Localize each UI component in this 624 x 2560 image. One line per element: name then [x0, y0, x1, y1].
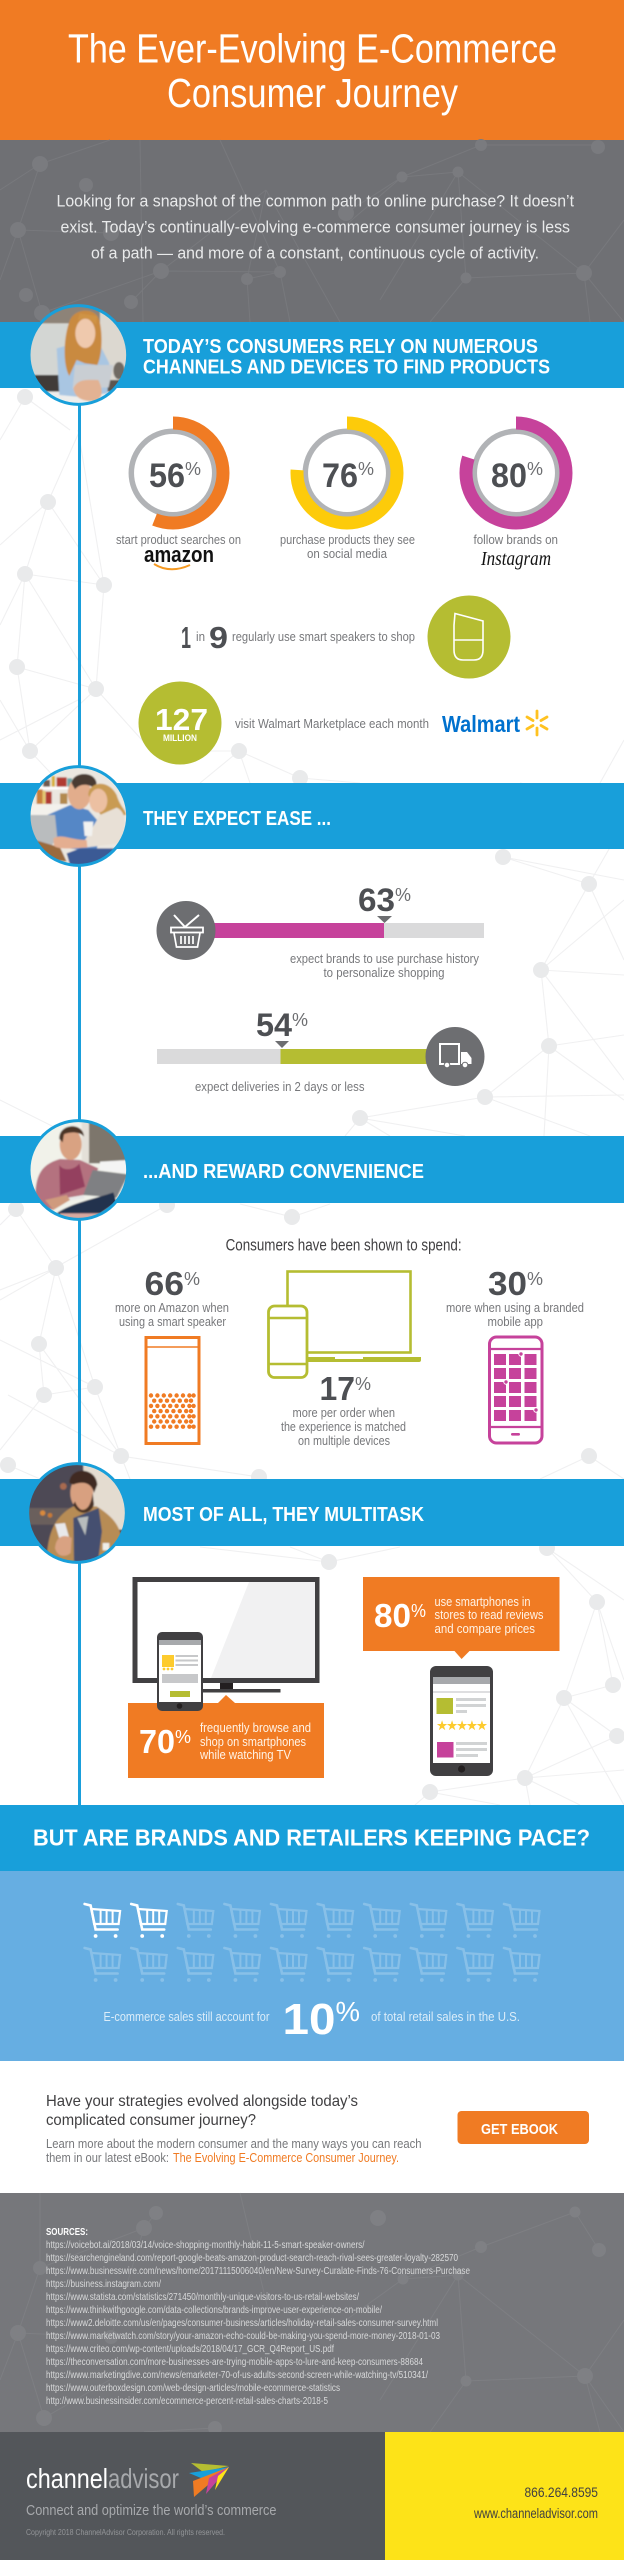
- stat: 17% multiple devices: %: [355, 1374, 371, 1394]
- callout: 80%: and compare prices: [434, 1622, 535, 1636]
- title: [68, 26, 557, 116]
- icon: delivery truck: [426, 1027, 484, 1086]
- stat: 63% purchase history bar: to personalize shopping: [324, 966, 445, 980]
- sources list: https://business.instagram.com/: [46, 2279, 161, 2290]
- heading: CHANNELS AND DEVICES TO FIND PRODUCTS: [143, 356, 550, 378]
- stat: 54% deliveries bar: %: [292, 1010, 308, 1030]
- body text: them in our latest eBook:: [46, 2151, 169, 2165]
- stat: 63% purchase history bar: %: [395, 885, 411, 905]
- stat: 56% amazon: 56: [149, 457, 185, 495]
- callout: 70%: [128, 1695, 324, 1778]
- heading: MOST OF ALL, THEY MULTITASK: [143, 1504, 424, 1526]
- stat: 17% multiple devices: 17: [320, 1370, 355, 1407]
- callout: 80%: [363, 1577, 560, 1659]
- stat: 1 in 9 smart speakers: [181, 596, 510, 678]
- logo: channeladvisor: advisor: [108, 2463, 179, 2494]
- stat: 80% instagram: follow brands on: [474, 533, 558, 547]
- icon: phone showing reviews: [430, 1666, 493, 1776]
- icon: phone with app grid: [490, 1337, 542, 1443]
- stat: 63% purchase history bar: [156, 882, 484, 980]
- icon: smart speaker: [428, 596, 510, 678]
- stat: 17% multiple devices: [268, 1272, 421, 1448]
- subheading: consumers spend: Consumers have been shown to spend:: [226, 1236, 462, 1254]
- body text: Learn more about the modern consumer and the many ways you can reach: [46, 2137, 422, 2151]
- sources list: https://voicebot.ai/2018/03/14/voice-shopping-monthly-habit-11-5-smart-speaker-owners/: [46, 2240, 365, 2251]
- sources list: https://searchengineland.com/report-google-beats-amazon-product-search-reach-rival-sees-greater-loyalty-282570: [46, 2253, 458, 2264]
- statistic text: 10: [282, 1995, 336, 2044]
- stat: 1 in 9 smart speakers: 9: [209, 620, 228, 655]
- marker: [377, 916, 392, 923]
- icon: television: [135, 1580, 317, 1692]
- logo: channeladvisor: [26, 2463, 229, 2497]
- heading: [143, 336, 550, 378]
- stat: 56% amazon: [116, 423, 241, 569]
- sources list: https://www.criteo.com/wp-content/uploads/2018/04/17_GCR_Q4Report_US.pdf: [46, 2344, 334, 2355]
- stat: 66% smart speaker: 66: [144, 1265, 184, 1302]
- section band: keeping pace: [0, 1805, 624, 1871]
- logo: amazon: amazon: [144, 542, 214, 567]
- stat: 127 million Walmart: [138, 682, 547, 764]
- callout: 70%: while watching TV: [199, 1748, 292, 1762]
- stat: 80% instagram: [466, 423, 566, 570]
- photo: man with smartphone: [27, 1463, 130, 1566]
- timeline line: [78, 400, 81, 1805]
- stat: 66% smart speaker: using a smart speaker: [119, 1315, 226, 1329]
- panel: title header: [0, 0, 624, 140]
- photo: couple with laptop: [27, 765, 130, 868]
- statistic text: [104, 1995, 520, 2044]
- footer: contact details: [385, 2432, 624, 2560]
- heading: BUT ARE BRANDS AND RETAILERS KEEPING PACE?: [33, 1824, 590, 1850]
- stat: 30% branded mobile app: mobile app: [488, 1315, 543, 1329]
- section band: reward convenience: [0, 1136, 624, 1203]
- stat: 30% branded mobile app: 30: [488, 1265, 527, 1302]
- photo: man with laptop: [27, 1118, 130, 1223]
- donut chart: [297, 423, 397, 523]
- section band: they expect ease: [0, 783, 624, 849]
- icon: smart speaker: [146, 1338, 199, 1444]
- icon: phone showing product: [157, 1632, 203, 1711]
- logo: instagram: Instagram: [480, 548, 551, 570]
- stat: 17% multiple devices: on multiple devices: [298, 1434, 390, 1448]
- stat: 17% multiple devices: the experience is matched: [281, 1420, 406, 1434]
- stat: 76% social media: %: [358, 459, 374, 479]
- marker: [275, 1041, 289, 1048]
- stat: 76% social media: on social media: [307, 547, 387, 561]
- stat: 30% branded mobile app: [446, 1265, 584, 1443]
- stat: 1 in 9 smart speakers: regularly use smart speakers to shop: [232, 630, 415, 644]
- logo: channeladvisor: channel: [26, 2463, 108, 2494]
- stat: 17% multiple devices: more per order when: [292, 1406, 395, 1420]
- callout: 70%: shop on smartphones: [200, 1735, 306, 1749]
- panel: sources: [0, 2193, 624, 2435]
- intro paragraph: [56, 192, 574, 262]
- statistic text: of total retail sales in the U.S.: [371, 2009, 520, 2024]
- stat: 66% smart speaker: %: [184, 1269, 200, 1289]
- stat: 66% smart speaker: [115, 1265, 229, 1444]
- section band: numerous channels: [0, 322, 624, 388]
- stat: 80% instagram: %: [527, 459, 543, 479]
- heading: ...AND REWARD CONVENIENCE: [143, 1161, 424, 1183]
- sources list: https://www.marketingdive.com/news/emarketer-70-of-us-adults-second-screen-while-watching-tv/510341/: [46, 2370, 428, 2381]
- sources list: [46, 2227, 470, 2407]
- heading: [46, 2093, 358, 2129]
- intro paragraph: exist. Today’s continually-evolving e-commerce consumer journey is less: [60, 218, 570, 236]
- pictogram: carts: [85, 1904, 539, 1982]
- icon: phone showing reviews: ★★★★★: [436, 1718, 488, 1733]
- stat: 76% social media: 76: [322, 457, 358, 495]
- intro paragraph: of a path — and more of a constant, continuous cycle of activity.: [91, 244, 539, 262]
- stat: 30% branded mobile app: %: [527, 1269, 543, 1289]
- stat: 1 in 9 smart speakers: in: [196, 630, 205, 644]
- title: Consumer Journey: [167, 70, 458, 116]
- panel: 10% of retail sales: [0, 1871, 624, 2061]
- stat: 76% social media: [280, 423, 415, 561]
- sources list: https://www2.deloitte.com/us/en/pages/consumer-business/articles/holiday-retail-sales-consumer-survey.html: [46, 2318, 438, 2329]
- sources list: https://www.statista.com/statistics/271450/monthly-unique-visitors-to-us-retail-websites/: [46, 2292, 359, 2303]
- heading: complicated consumer journey?: [46, 2112, 256, 2129]
- stat: 54% deliveries bar: [157, 1007, 484, 1094]
- callout: 70%: frequently browse and: [200, 1721, 311, 1735]
- donut chart: [123, 423, 223, 523]
- stat: 80% instagram: 80: [491, 457, 527, 495]
- sources list: https://theconversation.com/more-businesses-are-trying-mobile-apps-to-lure-and-keep-consumers-88684: [46, 2357, 423, 2368]
- logo: Walmart: Walmart: [442, 711, 520, 737]
- body text: The Evolving E-Commerce Consumer Journey.: [173, 2151, 399, 2165]
- stat: 127 million Walmart: visit Walmart Marketplace each month: [235, 717, 429, 731]
- stat: 1 in 9 smart speakers: 1: [181, 620, 191, 655]
- tagline: Connect and optimize the world’s commerce: [26, 2502, 276, 2519]
- button: get ebook: [458, 2111, 589, 2144]
- callout: 70%: 70: [139, 1723, 175, 1760]
- sources list: https://www.outerboxdesign.com/web-design-articles/mobile-ecommerce-statistics: [46, 2383, 340, 2394]
- sources list: https://www.marketwatch.com/story/your-amazon-echo-could-be-making-you-spend-more-money-2018-01-03: [46, 2331, 440, 2342]
- footer: contact details: 866.264.8595: [524, 2485, 598, 2500]
- body text: [46, 2137, 422, 2165]
- badge: 127 million: MILLION: [163, 733, 197, 743]
- donut chart: [466, 423, 566, 523]
- stat: 30% branded mobile app: more when using a branded: [446, 1301, 584, 1315]
- callout: 80%: use smartphones in: [434, 1595, 531, 1609]
- section band: they multitask: [0, 1479, 624, 1546]
- heading: THEY EXPECT EASE ...: [143, 808, 331, 830]
- stat: 54% deliveries bar: expect deliveries in 2 days or less: [195, 1080, 364, 1094]
- button: get ebook: GET EBOOK: [481, 2121, 558, 2138]
- stat: 56% amazon: start product searches on: [116, 533, 241, 547]
- copyright: Copyright 2018 ChannelAdvisor Corporation. All rights reserved.: [26, 2528, 225, 2537]
- sources list: https://www.businesswire.com/news/home/20171115006040/en/New-Survey-Curalate-Finds-76-Consumers-Purchase: [46, 2266, 470, 2277]
- statistic text: %: [336, 1996, 360, 2027]
- heading: Have your strategies evolved alongside today’s: [46, 2093, 358, 2110]
- stat: 54% deliveries bar: 54: [256, 1007, 292, 1043]
- illustration: TV and phone with 70% callout: [128, 1580, 324, 1778]
- stat: 63% purchase history bar: expect brands to use purchase history: [290, 952, 480, 966]
- stat: 56% amazon: %: [185, 459, 201, 479]
- footer: branding: [0, 2432, 385, 2560]
- sources list: https://www.thinkwithgoogle.com/data-collections/brands-improve-user-experience-on-mobile/: [46, 2305, 382, 2316]
- stat: 66% smart speaker: more on Amazon when: [115, 1301, 229, 1315]
- statistic text: E-commerce sales still account for: [104, 2009, 270, 2024]
- panel: introduction: [0, 139, 624, 322]
- photo: woman with tablet: [27, 303, 130, 408]
- call to action: [46, 2093, 589, 2165]
- sources list: http://www.businessinsider.com/ecommerce-percent-retail-sales-charts-2018-5: [46, 2396, 328, 2407]
- stat: 76% social media: purchase products they see: [280, 533, 415, 547]
- heading: TODAY’S CONSUMERS RELY ON NUMEROUS: [143, 336, 538, 358]
- badge: 127 million: 127: [155, 702, 208, 737]
- sources list: SOURCES:: [46, 2227, 88, 2238]
- callout: 70%: %: [175, 1727, 191, 1747]
- callout: 80%: stores to read reviews: [434, 1608, 544, 1622]
- stat: 63% purchase history bar: 63: [358, 882, 395, 918]
- callout: 80%: %: [411, 1601, 426, 1621]
- badge: 127 million: [138, 682, 222, 764]
- illustration: 80% callout and phone: [363, 1577, 560, 1776]
- callout: 80%: 80: [374, 1597, 411, 1634]
- icon: laptop and phone: [268, 1272, 421, 1378]
- icon: basket: [156, 901, 216, 960]
- intro paragraph: Looking for a snapshot of the common path to online purchase? It doesn’t: [56, 192, 574, 210]
- footer: contact details: www.channeladvisor.com: [473, 2506, 598, 2521]
